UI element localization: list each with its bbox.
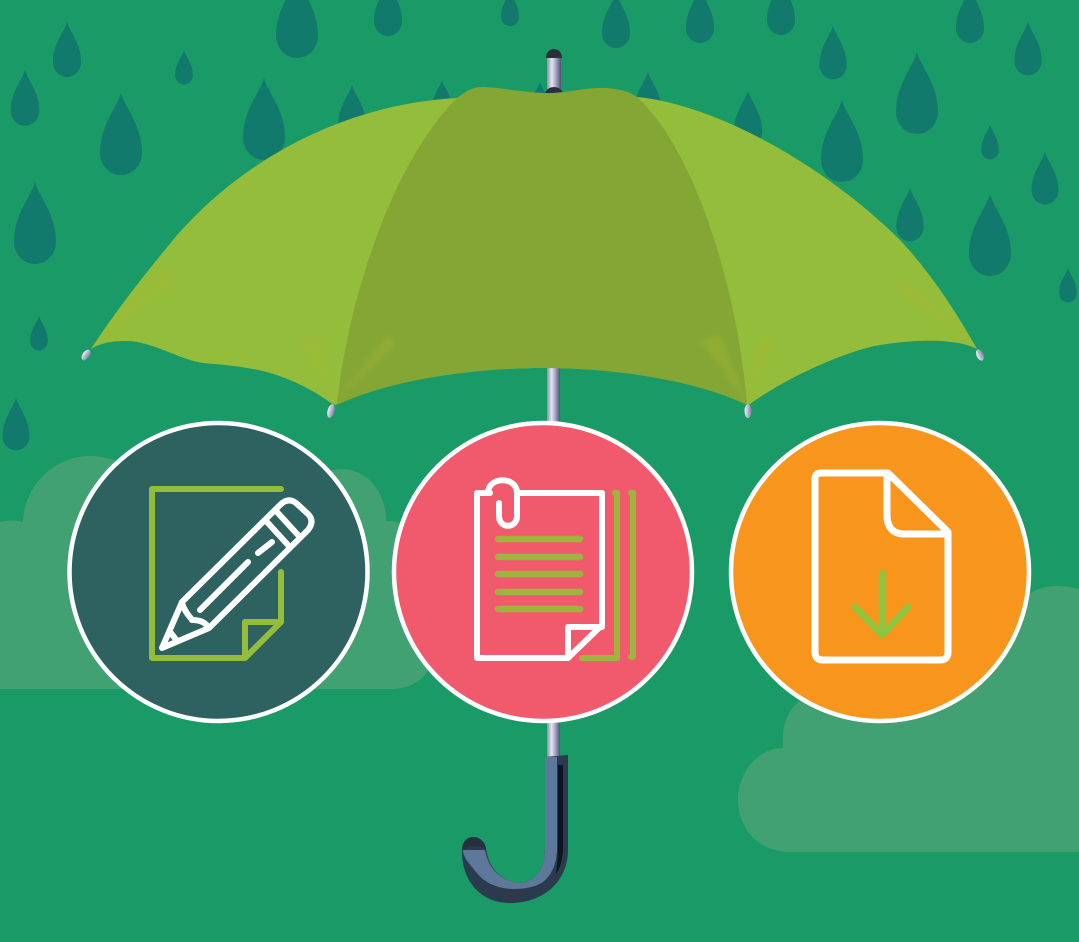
- umbrella canopy: [80, 87, 986, 419]
- icon: download arrow: [855, 573, 908, 635]
- canopy: fold creases: [92, 265, 976, 402]
- canopy: dark centre panel: [337, 87, 747, 405]
- raindrops: [3, 0, 1077, 450]
- umbrella pole: [545, 49, 563, 757]
- circle: pencil and note icon: [70, 423, 368, 721]
- icon: stacked pages: [582, 493, 633, 658]
- circle: file download icon: [731, 423, 1029, 721]
- circle: clipped document icon: [394, 423, 692, 721]
- canopy: rib tips: [80, 348, 986, 419]
- umbrella handle: [462, 755, 568, 903]
- clouds: [0, 456, 1079, 852]
- cloud: right: [738, 586, 1079, 852]
- icon: text lines: [498, 539, 580, 609]
- icon: file outline: [815, 473, 948, 660]
- cloud: left: [0, 456, 436, 689]
- icon: page with paperclip: [477, 480, 602, 658]
- canopy: light outer panels: [91, 97, 977, 405]
- icon: pencil: [162, 500, 312, 648]
- icon: note page: [152, 489, 281, 658]
